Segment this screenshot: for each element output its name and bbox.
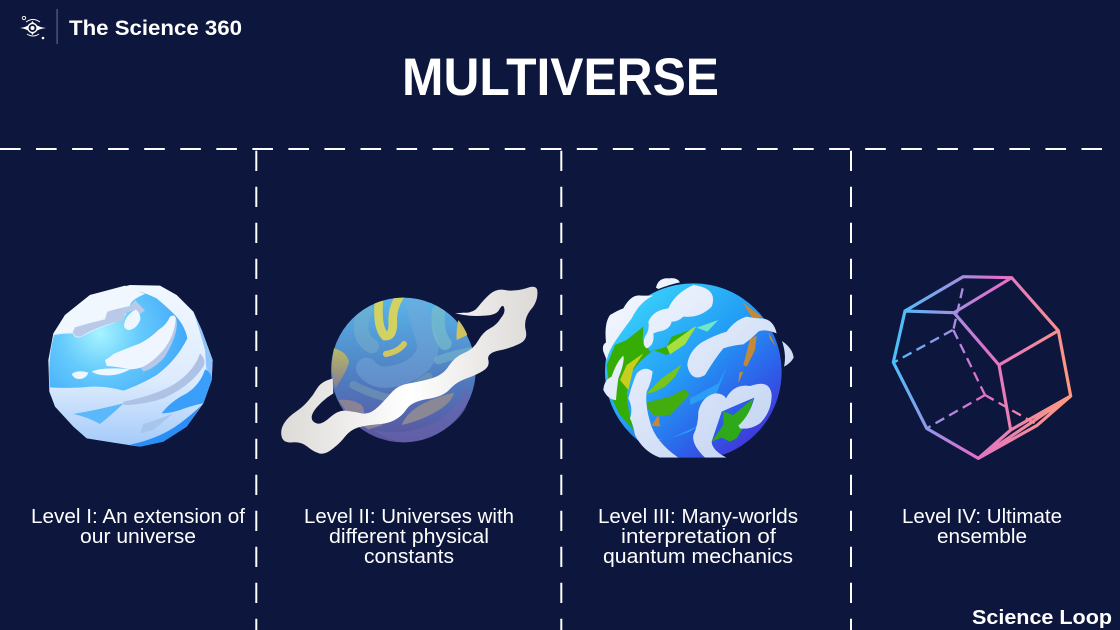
ring shadow — [123, 353, 204, 405]
central cloud — [105, 316, 176, 369]
khaki land — [457, 320, 467, 340]
island — [124, 309, 140, 330]
blue ocean — [49, 288, 187, 391]
caption: level III: interpretation of — [621, 526, 776, 548]
caption: level II: Level II: Universes with — [304, 506, 514, 528]
upper left edge cloud — [603, 295, 653, 360]
logo — [20, 9, 242, 44]
icon: polyhedron wireframe (level IV) — [893, 277, 1071, 458]
solid edges — [893, 277, 1071, 458]
caption: level III — [598, 506, 798, 568]
logo text: The Science 360 — [69, 17, 242, 40]
small top cloud — [656, 278, 680, 289]
caption: level II — [304, 506, 514, 568]
planet body — [331, 298, 476, 442]
lower rim — [373, 387, 469, 442]
cloud shadow — [140, 317, 177, 372]
lower right ring cloud — [693, 384, 772, 458]
wavy ring — [281, 287, 537, 454]
caption: level IV: Level IV: Ultimate — [902, 506, 1062, 528]
ice cap shadow — [73, 300, 145, 337]
caption: level I — [31, 506, 245, 548]
polar cap — [644, 285, 713, 348]
icon: ringed planet (level II) — [281, 287, 537, 454]
top white cap — [54, 286, 145, 333]
credit: Science Loop — [972, 607, 1112, 629]
title: MULTIVERSE — [402, 48, 719, 107]
right rim shading — [193, 312, 213, 403]
ocean shallows — [670, 365, 727, 438]
globe — [605, 283, 782, 460]
icon: Earth-like planet with clouds (level III) — [603, 278, 794, 460]
small clouds — [72, 368, 130, 379]
lower blue stripes — [73, 403, 123, 424]
logo divider — [56, 9, 58, 44]
caption: level II: different physical — [329, 526, 489, 548]
right small cloud — [782, 341, 794, 367]
caption: level III: Level III: Many-worlds — [598, 506, 798, 528]
dashed dividers — [0, 149, 1102, 630]
caption: level I: our universe — [80, 526, 196, 548]
caption: level III: quantum mechanics — [603, 546, 793, 568]
planet base — [48, 285, 213, 447]
icon: icy blue planet (level I) — [48, 285, 213, 447]
caption: level II: constants — [364, 546, 454, 568]
icon: cosmic eye — [20, 16, 46, 39]
central cloud — [687, 317, 777, 377]
caption: level IV — [902, 506, 1062, 548]
left small cloud — [603, 356, 624, 400]
dashed hidden edges — [894, 288, 1037, 428]
land masses — [607, 327, 690, 430]
clouds — [603, 278, 794, 458]
planet bands — [353, 295, 470, 398]
caption: level I: Level I: An extension of — [31, 506, 245, 528]
caption: level IV: ensemble — [937, 526, 1027, 548]
long lower left cloud — [628, 369, 678, 458]
